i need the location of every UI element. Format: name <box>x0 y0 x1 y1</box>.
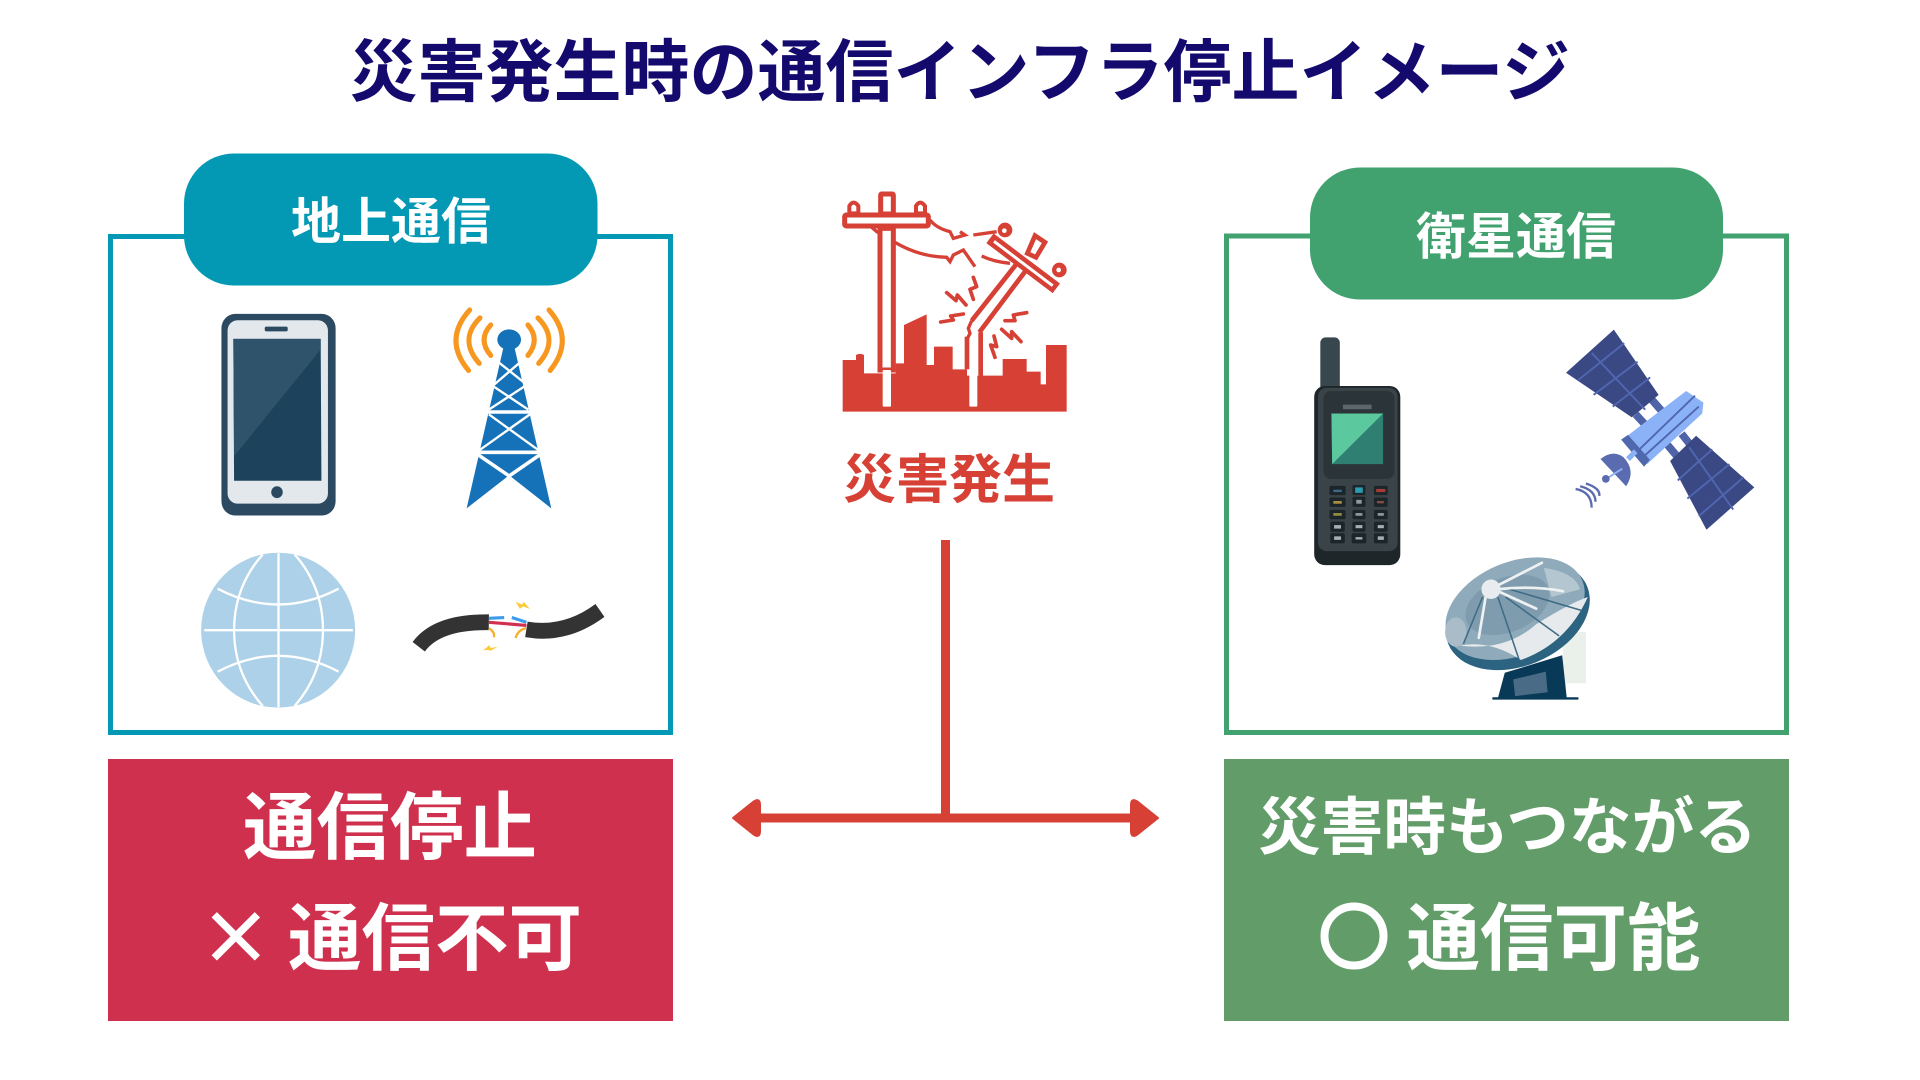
icon: disaster, broken utility poles <box>843 194 1067 412</box>
heading pill: satellite <box>1310 168 1723 300</box>
heading pill: satellite: 衛星通信 <box>1416 209 1616 265</box>
panel frame: terrestrial <box>110 236 670 732</box>
callout: communication outage <box>108 759 673 1021</box>
icon: smartphone <box>221 314 336 516</box>
disaster label: 災害発生 <box>843 451 1055 510</box>
panel frame: satellite <box>1226 236 1786 732</box>
callout: communication outage: 通信不可 <box>288 897 582 980</box>
icon: radio tower <box>456 310 562 508</box>
icon: satellite phone <box>1314 337 1400 565</box>
callout: communication outage: 通信停止 <box>243 786 537 869</box>
icon: globe <box>201 553 355 708</box>
icon: broken cable <box>419 602 600 651</box>
callout: connected during disaster: 通信可能 <box>1406 897 1700 980</box>
title: 災害発生時の通信インフラ停止イメージ <box>350 35 1570 111</box>
heading pill: terrestrial: 地上通信 <box>291 194 491 250</box>
panel: terrestrial communication <box>110 154 670 732</box>
callout: communication outage: × <box>199 880 272 986</box>
callout: connected during disaster <box>1224 759 1789 1021</box>
panel: satellite communication <box>1226 168 1786 732</box>
icon: satellite <box>1566 330 1754 530</box>
icon: parabolic antenna <box>1430 538 1606 700</box>
arrow: branching both ways <box>733 540 1158 836</box>
callout: connected during disaster: 災害時もつながる <box>1258 793 1757 863</box>
heading pill: terrestrial <box>184 154 598 286</box>
